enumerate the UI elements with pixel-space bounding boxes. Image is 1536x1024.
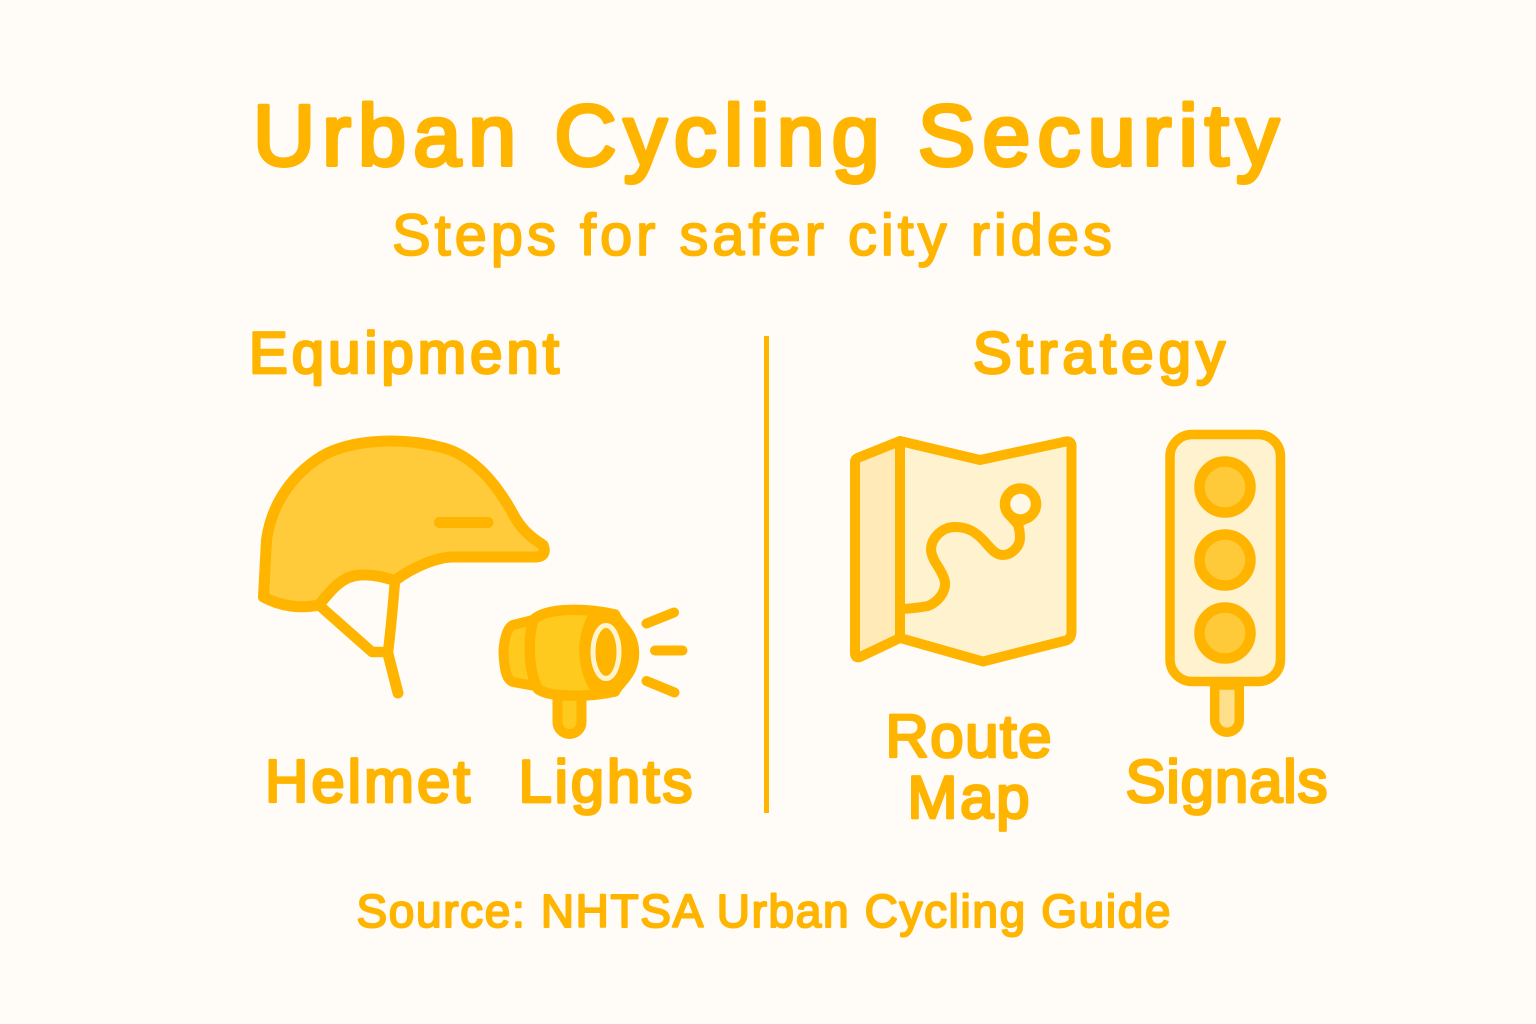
label: Route Map: Map <box>908 764 1030 831</box>
label: Helmet: Helmet <box>265 748 470 815</box>
icon: traffic signal <box>1170 434 1280 732</box>
heading: Strategy: Strategy <box>973 321 1225 386</box>
label: Lights: Lights <box>518 748 692 815</box>
heading: Equipment: Equipment <box>249 321 559 386</box>
label: Signals: Signals <box>1126 748 1328 815</box>
label: Route Map: Route <box>886 703 1052 770</box>
icon: helmet <box>264 441 544 693</box>
subtitle: Steps for safer city rides <box>392 203 1112 268</box>
title: Urban Cycling Security <box>253 88 1279 184</box>
center divider <box>764 336 769 813</box>
source note: Source: NHTSA Urban Cycling Guide <box>356 885 1170 937</box>
icon: route map <box>855 441 1072 662</box>
icon: bike light <box>504 610 682 734</box>
